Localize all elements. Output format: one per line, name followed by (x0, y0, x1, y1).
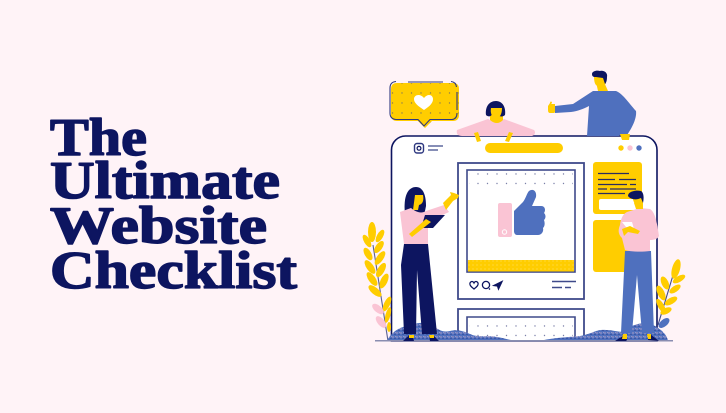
face (632, 197, 643, 207)
ground line (375, 340, 673, 342)
torso (619, 208, 659, 252)
title: Checklist (50, 242, 297, 300)
shoes (403, 335, 439, 341)
yellow forearm (443, 192, 459, 210)
hair (405, 187, 426, 216)
browser window (392, 136, 657, 341)
yellow side panel top (593, 162, 642, 214)
yellow side panel bottom (593, 220, 643, 272)
speech bubble with heart (390, 82, 459, 128)
torso and raised arm (400, 205, 449, 244)
caption lines (552, 282, 576, 288)
post image (467, 170, 575, 272)
yellow band (468, 260, 574, 272)
person: man giving thumbs up (548, 71, 636, 140)
window buttons (618, 145, 642, 151)
pants (401, 244, 437, 334)
post card (458, 163, 584, 299)
person: man with notebook (615, 191, 659, 341)
clipboard (421, 215, 445, 228)
post action icons (470, 281, 502, 290)
hand with pen (409, 219, 431, 237)
face (413, 195, 423, 210)
title: The (50, 109, 147, 167)
hands (622, 226, 640, 236)
ground bushes (387, 323, 668, 341)
title (50, 109, 297, 300)
neck (634, 203, 643, 209)
pants (621, 251, 654, 333)
notebook (622, 222, 634, 229)
address bar (485, 143, 563, 153)
thumbs up icon (498, 190, 546, 237)
instagram icon (414, 144, 443, 153)
right plant (654, 258, 687, 330)
second post card (458, 309, 584, 341)
person: woman peeking over window (457, 101, 535, 142)
person: woman with clipboard (400, 187, 459, 341)
shoes (615, 334, 659, 341)
title: Ultimate (50, 152, 280, 210)
left plant (361, 222, 393, 341)
hair (628, 191, 644, 203)
title: Website (50, 197, 267, 255)
